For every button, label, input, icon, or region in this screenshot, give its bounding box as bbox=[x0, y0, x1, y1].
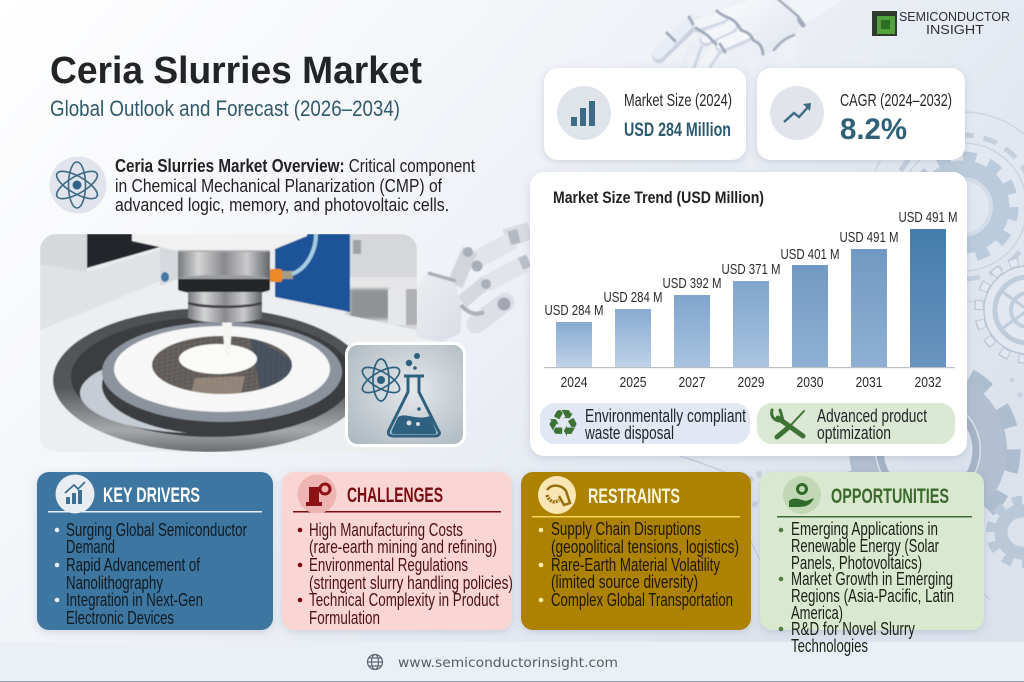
list: Surging Global Semiconductor bbox=[66, 520, 247, 540]
pill: product optimization: optimization bbox=[817, 423, 891, 443]
bar chart: USD 392 M bbox=[662, 275, 722, 292]
list: Nanolithography bbox=[66, 573, 163, 593]
icon: atom overview bbox=[50, 156, 106, 214]
opportunities list: Market Growth in Emerging bbox=[791, 569, 953, 589]
heading: CHALLENGES bbox=[347, 484, 443, 507]
list: (stringent slurry handling policies) bbox=[309, 573, 513, 593]
heading: OPPORTUNITIES bbox=[831, 485, 949, 508]
list: (geopolitical tensions, logistics) bbox=[551, 537, 739, 557]
icon: cost machine bbox=[298, 474, 336, 514]
icon: globe bbox=[368, 654, 382, 670]
list: Formulation bbox=[309, 608, 380, 628]
panel: opportunities bbox=[760, 472, 984, 630]
opportunities list: Regions (Asia-Pacific, Latin bbox=[791, 586, 954, 606]
panel: key drivers bbox=[37, 472, 273, 630]
list bbox=[55, 520, 247, 628]
icon: trend arrow bbox=[770, 86, 824, 140]
list: Rapid Advancement of bbox=[66, 555, 201, 575]
bar chart: USD 491 M bbox=[898, 209, 958, 226]
logo: SEMICONDUCTOR bbox=[899, 9, 1010, 24]
list: Supply Chain Disruptions bbox=[551, 519, 701, 539]
opportunities list: Panels, Photovoltaics) bbox=[791, 553, 922, 573]
icon: supply chain bbox=[538, 476, 576, 514]
panel: market size trend bbox=[530, 172, 967, 456]
logo bbox=[872, 9, 1010, 37]
footer bar bbox=[0, 642, 1024, 682]
pill: waste disposal bbox=[540, 402, 750, 445]
panel: CAGR card: 8.2% bbox=[840, 113, 907, 146]
list: (rare-earth mining and refining) bbox=[309, 537, 497, 557]
list: Technical Complexity in Product bbox=[309, 590, 499, 610]
opportunities list: America) bbox=[791, 603, 843, 623]
bar chart: 2024 bbox=[560, 374, 588, 391]
background gears bbox=[680, 112, 1024, 600]
bar chart: 2030 bbox=[796, 374, 824, 391]
list: Complex Global Transportation bbox=[551, 590, 733, 610]
pill: waste disposal: Environmentally compliant bbox=[585, 406, 746, 426]
list bbox=[298, 520, 513, 628]
panel: market size card: USD 284 Million bbox=[624, 120, 731, 141]
bar chart: USD 284 M bbox=[544, 302, 604, 319]
pill: waste disposal: waste disposal bbox=[584, 423, 674, 443]
bar chart: USD 284 M bbox=[604, 289, 662, 306]
icon: science flask panel bbox=[346, 344, 464, 446]
opportunities list: Emerging Applications in bbox=[791, 519, 938, 539]
list: (limited source diversity) bbox=[551, 572, 698, 592]
panel: market size card bbox=[544, 68, 746, 160]
title: Ceria Slurries Market bbox=[50, 50, 422, 92]
icon: hand with gear bbox=[783, 476, 821, 514]
list: Rare-Earth Material Volatility bbox=[551, 555, 720, 575]
robot hand top bbox=[658, 0, 842, 74]
bar chart: USD 401 M bbox=[780, 246, 840, 263]
list: High Manufacturing Costs bbox=[309, 520, 463, 540]
panel: CMP machine photo bbox=[40, 234, 417, 452]
pill: product optimization bbox=[757, 403, 955, 444]
list: Environmental Regulations bbox=[309, 555, 468, 575]
bar chart: 2031 bbox=[856, 374, 882, 391]
bar chart: 2029 bbox=[738, 374, 764, 391]
pill: product optimization: Advanced product bbox=[817, 406, 927, 426]
panel: restraints bbox=[521, 472, 751, 630]
opportunities list: Technologies bbox=[791, 636, 868, 656]
chart title: Market Size Trend (USD Million) bbox=[553, 188, 764, 207]
bar chart: 2032 bbox=[914, 374, 942, 391]
pill: waste disposal: ♻ bbox=[546, 402, 580, 445]
subtitle: Global Outlook and Forecast (2026–2034) bbox=[50, 96, 400, 121]
robot hand middle bbox=[415, 229, 531, 342]
bar chart: USD 491 M bbox=[840, 229, 898, 246]
list: Electronic Devices bbox=[66, 608, 174, 628]
panel: CAGR card bbox=[757, 68, 965, 160]
panel: market size card: Market Size (2024) bbox=[624, 90, 732, 110]
overview text: Ceria Slurries Market Overview: Critical component bbox=[115, 156, 475, 176]
icon: bar chart bbox=[557, 86, 611, 140]
footer bar: www.semiconductorinsight.com bbox=[398, 655, 618, 671]
panel: challenges bbox=[282, 472, 513, 630]
bar chart: 2025 bbox=[620, 374, 646, 391]
list: Integration in Next-Gen bbox=[66, 590, 203, 610]
opportunities list: Renewable Energy (Solar bbox=[791, 536, 939, 556]
icon: growth chart bbox=[56, 474, 94, 514]
overview text: in Chemical Mechanical Planarization (CMP) of bbox=[115, 176, 443, 196]
logo: INSIGHT bbox=[926, 22, 984, 37]
panel: CAGR card: CAGR (2024–2032) bbox=[840, 90, 952, 110]
overview text bbox=[115, 156, 475, 215]
heading: KEY DRIVERS bbox=[103, 484, 200, 507]
opportunities list: R&D for Novel Slurry bbox=[791, 619, 915, 639]
list: Demand bbox=[66, 537, 115, 557]
list bbox=[539, 519, 739, 610]
bar chart: 2027 bbox=[678, 374, 706, 391]
bar chart: USD 371 M bbox=[722, 261, 780, 278]
heading: RESTRAINTS bbox=[588, 485, 680, 508]
bar chart bbox=[544, 209, 958, 391]
opportunities list bbox=[779, 519, 954, 656]
overview text: advanced logic, memory, and photovoltaic cells. bbox=[115, 195, 449, 215]
